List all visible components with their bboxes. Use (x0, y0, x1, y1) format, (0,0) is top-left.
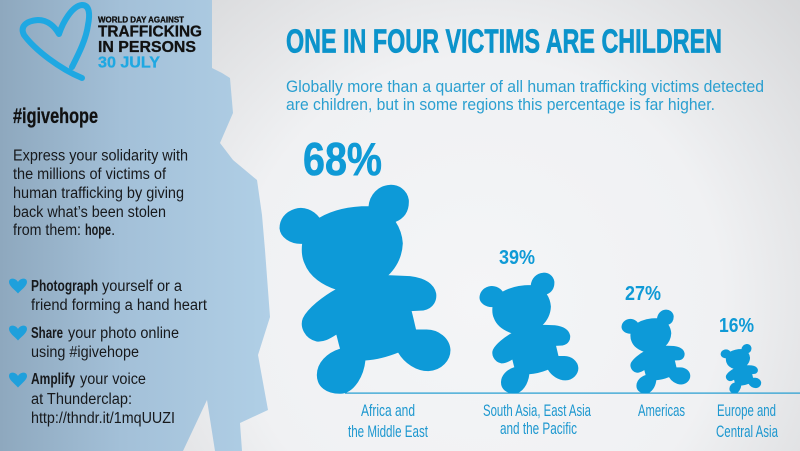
action: photograph: yourself or a (102, 278, 182, 295)
region label: the Middle East (348, 422, 428, 441)
intro text (286, 77, 764, 114)
icon: heart bullet (9, 373, 27, 388)
value: 16%: 16% (719, 315, 754, 337)
region label (716, 401, 778, 441)
logo text: IN PERSONS (98, 39, 196, 56)
action: share: your photo online (68, 325, 179, 342)
logo text: 30 JULY (98, 54, 161, 72)
action: amplify (9, 371, 175, 427)
solidarity paragraph (13, 148, 188, 239)
chart item: South Asia, East Asia and the Pacific (480, 247, 591, 438)
solidarity paragraph: human trafficking by giving (13, 185, 184, 202)
action: amplify: your voice (80, 371, 146, 388)
hashtag heading: #igivehope (13, 105, 98, 128)
region label: Africa and (361, 401, 415, 420)
intro text: are children, but in some regions this percentage is far higher. (286, 95, 715, 114)
chart item: Africa and the Middle East (280, 133, 450, 441)
region label: Americas (638, 401, 685, 420)
region label: and the Pacific (500, 419, 577, 438)
intro text: Globally more than a quarter of all human trafficking victims detected (286, 77, 764, 96)
baseline rule (345, 392, 800, 394)
chart item: Americas (622, 283, 690, 420)
icon: teddy bear small (622, 310, 690, 393)
logo: World Day Against Trafficking in Persons (23, 5, 202, 78)
value: 27%: 27% (625, 283, 661, 305)
action: amplify: Amplify (31, 371, 75, 388)
solidarity paragraph: from them: (13, 222, 81, 239)
chart item: Europe and Central Asia (716, 315, 778, 441)
action: photograph: friend forming a hand heart (31, 297, 208, 314)
solidarity paragraph: the millions of victims of (13, 166, 167, 183)
region label: South Asia, East Asia (483, 401, 591, 420)
solidarity paragraph: . (111, 222, 115, 239)
logo text: WORLD DAY AGAINST (98, 16, 184, 24)
action: share: Share (31, 325, 63, 342)
icon: teddy bear tiny (721, 344, 761, 393)
logo text (98, 16, 202, 72)
region label (483, 401, 591, 438)
icon: blue heart outline (23, 5, 89, 78)
value: 39%: 39% (499, 247, 535, 269)
solidarity paragraph: hope (85, 222, 111, 239)
action: share (9, 325, 179, 361)
icon: teddy bear large (280, 185, 450, 393)
icon: heart bullet (9, 326, 27, 340)
value: 68%: 68% (303, 133, 382, 185)
solidarity paragraph: Express your solidarity with (13, 148, 188, 164)
icon: teddy bear medium (480, 273, 578, 393)
action: share: using #igivehope (31, 344, 139, 361)
action: photograph: Photograph (31, 278, 98, 295)
solidarity paragraph: back what’s been stolen (13, 204, 166, 221)
silhouette panel: person in blue (0, 0, 270, 451)
region label (348, 401, 428, 441)
action: amplify: at Thunderclap: (31, 391, 132, 408)
icon: heart bullet (9, 279, 27, 294)
logo text: TRAFFICKING (98, 24, 202, 40)
action: photograph (9, 278, 208, 314)
action: amplify: http://thndr.it/1mqUUZI (31, 410, 175, 427)
